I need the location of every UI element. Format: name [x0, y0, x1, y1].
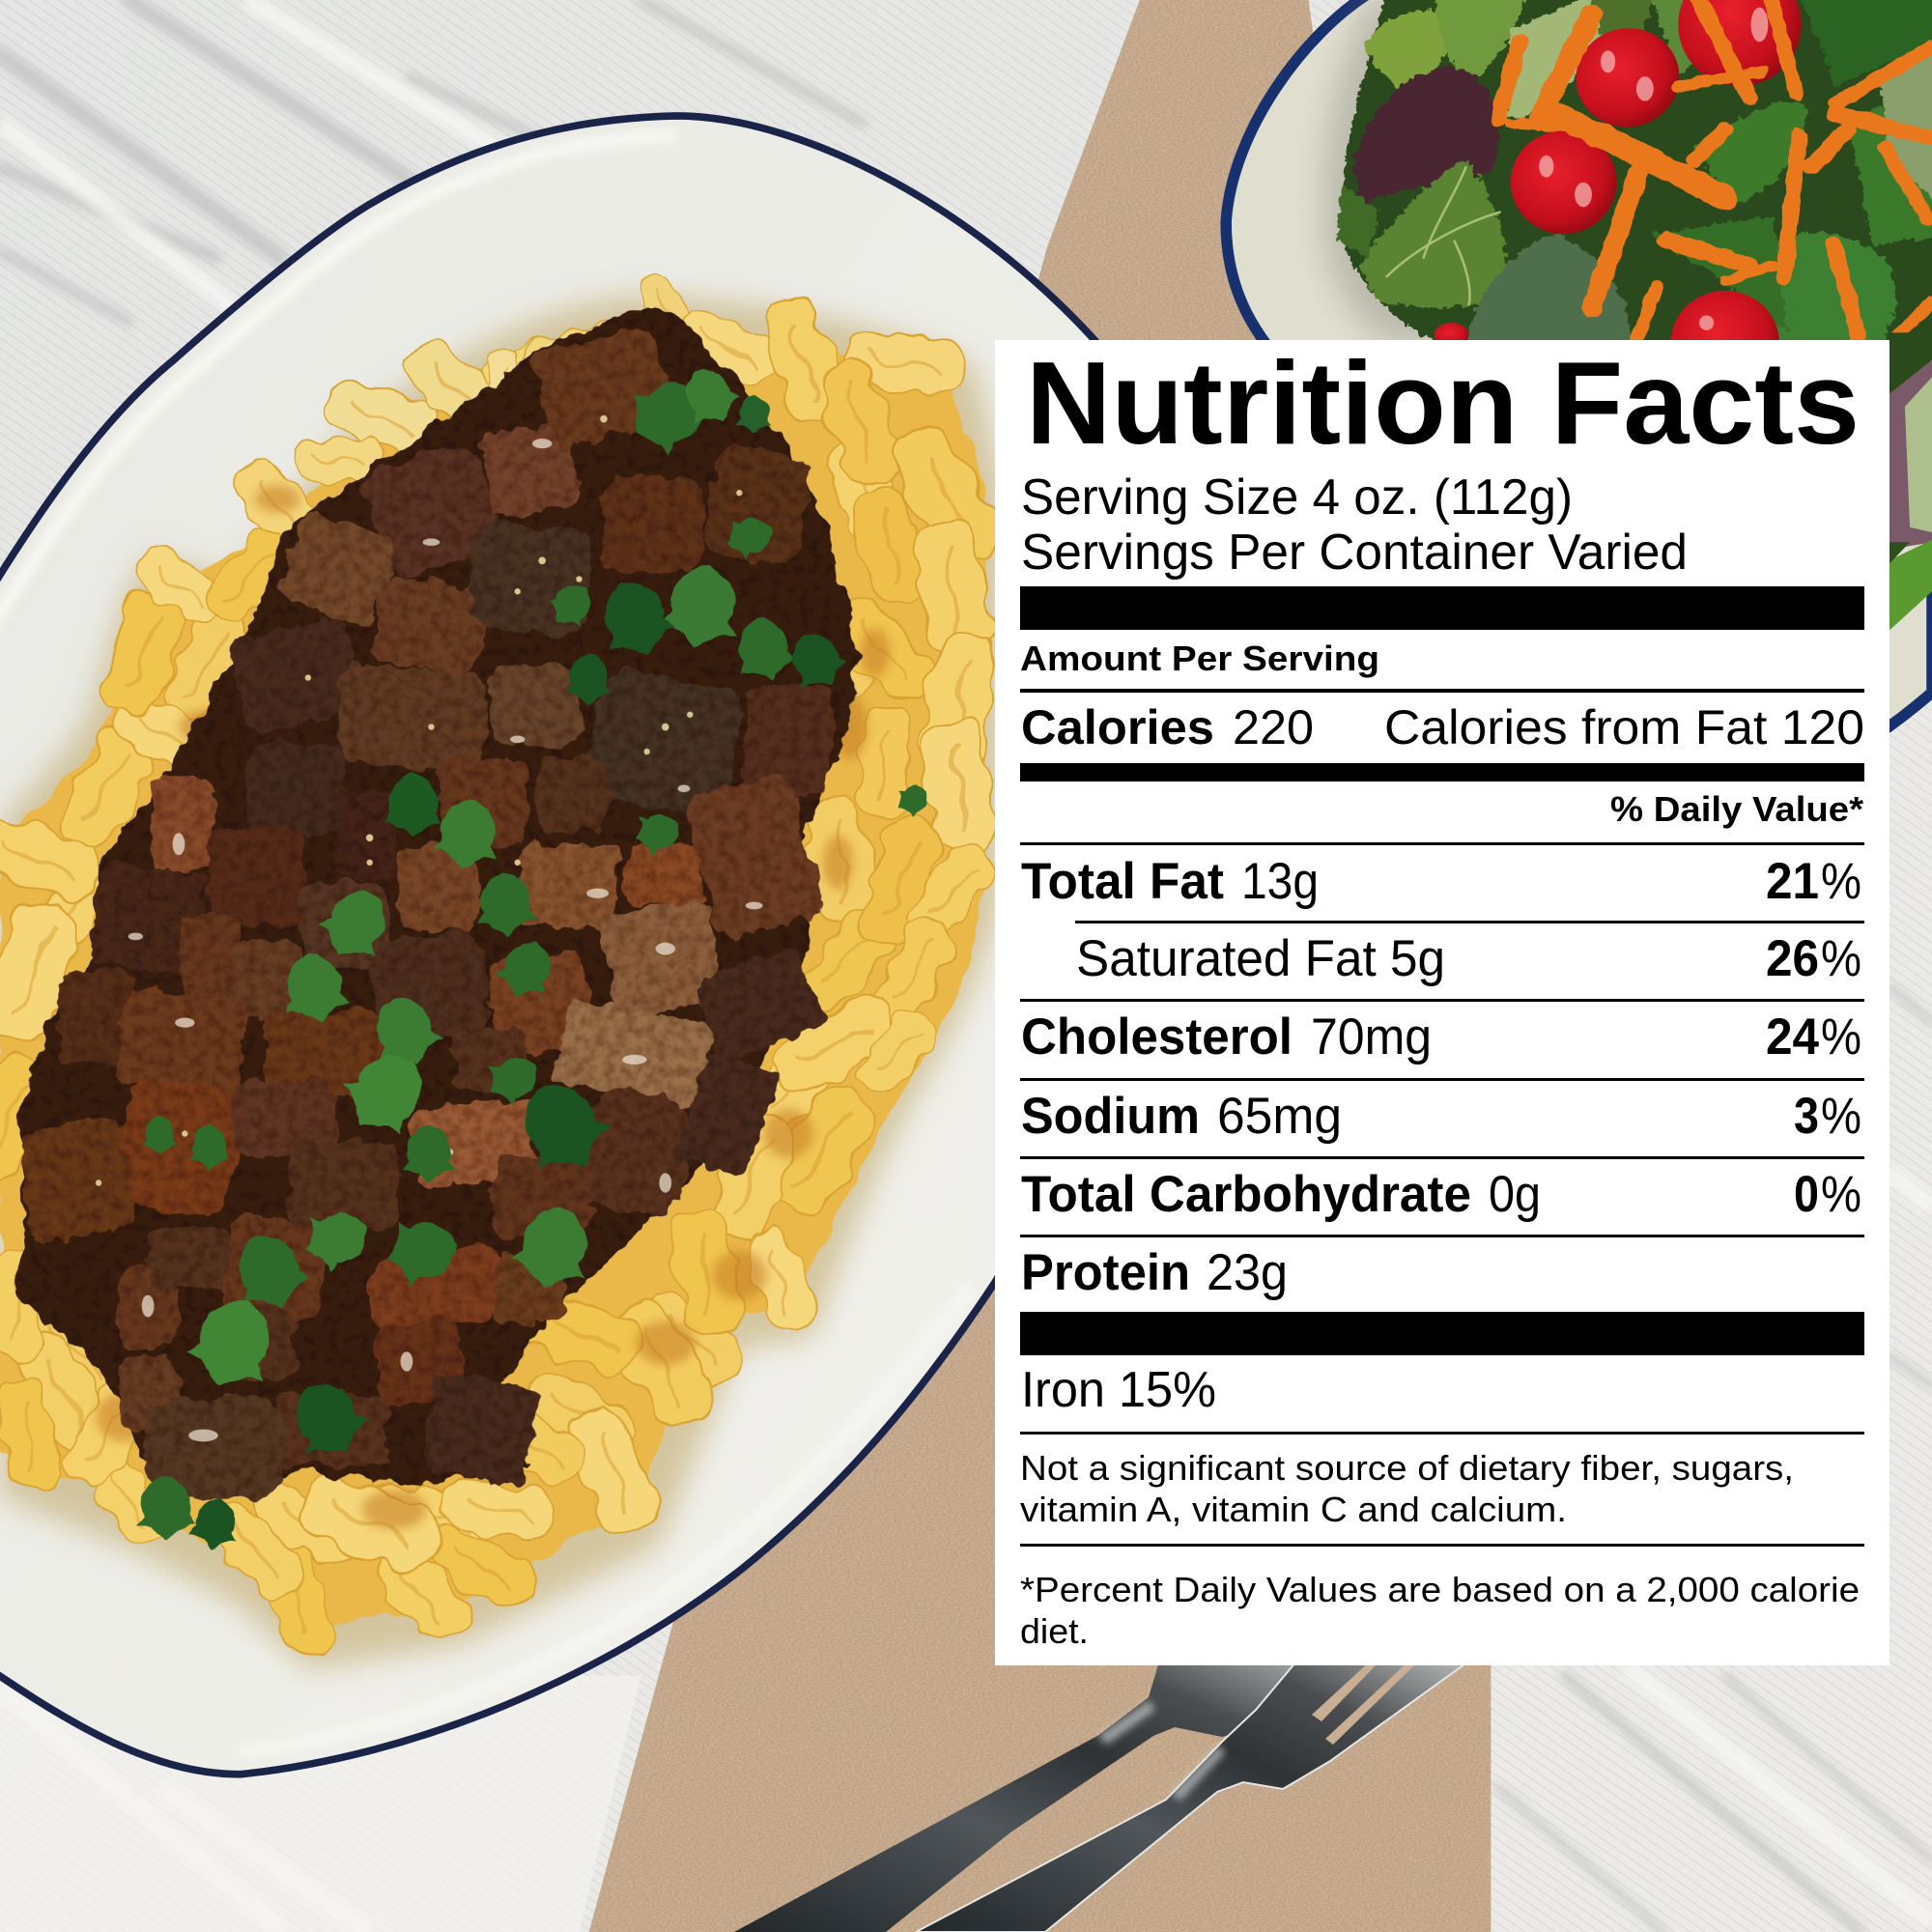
silverware: back utensil [734, 1662, 1468, 1932]
sodium row [1021, 1088, 1861, 1145]
cholesterol row: 70mg [1311, 1009, 1432, 1065]
serving info [1021, 469, 1688, 581]
cholesterol row: 24 [1766, 1009, 1819, 1065]
cholesterol row [1021, 1009, 1861, 1065]
cholesterol row: % [1821, 1009, 1861, 1065]
right side of salad plate beside the label [1889, 332, 1932, 631]
total fat row: % [1821, 853, 1861, 910]
total carbohydrate row [1021, 1166, 1861, 1223]
total fat row [1021, 853, 1861, 910]
glaze highlights and pepper [128, 439, 763, 1441]
nutrient note: vitamin A, vitamin C and calcium. [1020, 1490, 1567, 1529]
title: Nutrition Facts [1026, 337, 1860, 469]
total fat row: 13g [1241, 853, 1319, 910]
tomatoes [1435, 0, 1802, 394]
sauce stains [96, 486, 890, 1529]
calories row [1021, 700, 1864, 754]
total carbohydrate row: Total Carbohydrate [1021, 1166, 1471, 1223]
cholesterol row: Cholesterol [1021, 1009, 1293, 1065]
nutrition facts panel [995, 337, 1889, 1665]
protein row: 23g [1207, 1244, 1288, 1301]
salad greens [1337, 0, 1932, 353]
parsley [137, 358, 934, 1553]
iron row: Iron 15% [1021, 1362, 1216, 1418]
nutrient note: Not a significant source of dietary fiber, sugars, [1020, 1448, 1794, 1488]
protein row [1021, 1244, 1288, 1301]
total carbohydrate row: 0g [1489, 1166, 1541, 1223]
total carbohydrate row: % [1821, 1166, 1861, 1223]
total fat row: Total Fat [1021, 853, 1224, 910]
daily value footnote: *Percent Daily Values are based on a 2,000 calorie [1020, 1570, 1860, 1609]
serving info: Servings Per Container Varied [1021, 525, 1688, 581]
daily value header: % Daily Value* [1610, 789, 1863, 829]
dark gravy base [14, 305, 857, 1497]
sodium row: Sodium [1021, 1088, 1200, 1145]
white serving platter [0, 116, 1164, 1775]
sodium row: 65mg [1217, 1088, 1342, 1145]
saturated fat row: Saturated Fat 5g [1076, 930, 1445, 987]
napkin [589, 0, 1491, 1932]
calories row: Calories [1021, 700, 1214, 754]
saturated fat row [1076, 930, 1861, 987]
sodium row: 3 [1794, 1088, 1819, 1145]
sodium row: % [1821, 1088, 1861, 1145]
daily value footnote: diet. [1020, 1611, 1089, 1651]
silverware: front fork [916, 1662, 1468, 1932]
total carbohydrate row: 0 [1794, 1166, 1819, 1223]
salad plate [1226, 0, 1932, 788]
daily value footnote [1020, 1570, 1860, 1651]
calories row: Calories from Fat 120 [1384, 700, 1864, 754]
saturated fat row: % [1821, 930, 1861, 987]
carrot shreds [1498, 0, 1932, 340]
egg noodles [0, 268, 1015, 1669]
beef tips [14, 305, 857, 1497]
saturated fat row: 26 [1766, 930, 1819, 987]
calories row: 220 [1233, 700, 1314, 754]
protein row: Protein [1021, 1244, 1190, 1301]
serving info: Serving Size 4 oz. (112g) [1021, 469, 1573, 526]
amount per serving: Amount Per Serving [1020, 639, 1379, 678]
total fat row: 21 [1766, 853, 1819, 910]
nutrient note [1020, 1448, 1794, 1529]
